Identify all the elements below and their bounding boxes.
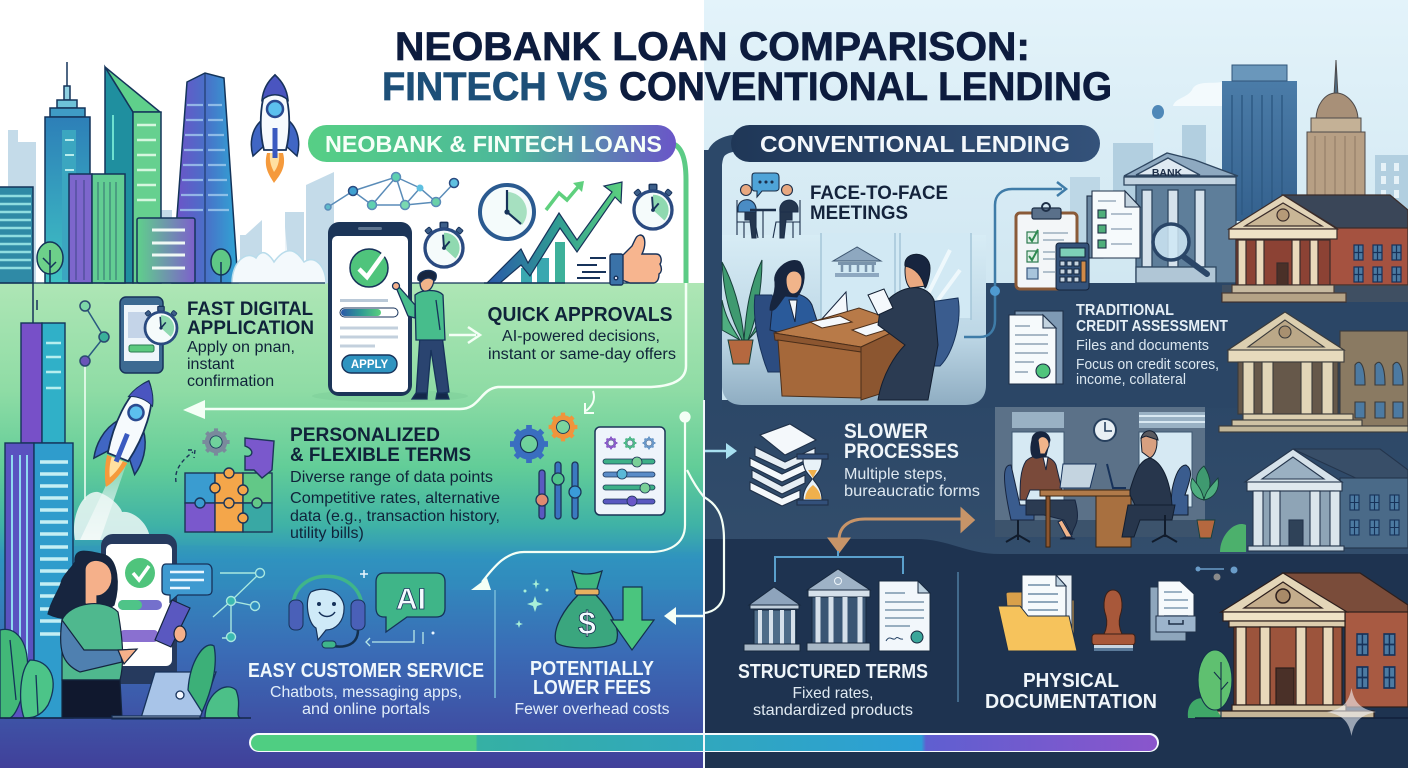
text: personalized and flexible terms: PERSONALIZED bbox=[290, 424, 440, 446]
panel outline: neobank bbox=[660, 143, 686, 283]
text: physical documentation: DOCUMENTATION bbox=[985, 691, 1157, 713]
dark band top bbox=[973, 283, 1408, 408]
icon: clipboard bbox=[1016, 203, 1077, 289]
bank bbox=[1124, 153, 1238, 283]
icon: gears and sliders bbox=[510, 413, 581, 519]
building: purple green bbox=[69, 174, 125, 283]
text: quick approvals bbox=[488, 304, 676, 363]
desk bbox=[774, 308, 908, 400]
person: woman using tablet bbox=[48, 551, 190, 718]
trees bbox=[37, 242, 231, 283]
pill: neobank heading bbox=[308, 125, 676, 162]
text: easy customer service: Chatbots, messaging apps, bbox=[270, 684, 462, 701]
tower: teal bbox=[45, 62, 90, 283]
text: fast digital application: confirmation bbox=[187, 373, 274, 390]
building: brick large bbox=[1214, 573, 1408, 718]
text: personalized and flexible terms: utility bills) bbox=[290, 525, 364, 542]
nodes bbox=[1196, 566, 1238, 580]
title: NEOBANK LOAN COMPARISON: bbox=[395, 25, 1030, 69]
title: FINTECH VS bbox=[382, 65, 608, 109]
icon: stamp bbox=[1092, 590, 1135, 651]
bracket: conventional bbox=[713, 143, 735, 410]
text: quick approvals: AI-powered decisions, bbox=[502, 328, 660, 345]
panel background: conventional side bbox=[704, 0, 1408, 768]
icon: laptop bbox=[112, 672, 216, 719]
text: personalized and flexible terms: data (e.g., transaction history, bbox=[290, 508, 500, 525]
text: structured terms bbox=[738, 661, 928, 719]
plant bbox=[722, 260, 762, 364]
ground line bbox=[0, 282, 640, 284]
building: gradient bbox=[137, 218, 195, 283]
panel background: neobank side bbox=[0, 0, 704, 768]
text: potentially lower fees: POTENTIALLY bbox=[530, 658, 655, 680]
title bbox=[382, 25, 1112, 109]
icon: chat bubble bbox=[162, 564, 212, 602]
text: structured terms: STRUCTURED TERMS bbox=[738, 661, 928, 683]
chairs bbox=[754, 295, 790, 372]
icon: gear and puzzle bbox=[176, 428, 274, 532]
phone: apply: APPLY bbox=[351, 359, 388, 371]
stopwatch bbox=[634, 184, 672, 229]
icon: thumbs up bbox=[577, 235, 661, 285]
text: face to face meetings: MEETINGS bbox=[810, 203, 908, 224]
small curved arrow bbox=[585, 391, 594, 413]
text: potentially lower fees bbox=[514, 658, 670, 718]
text: slower processes: Multiple steps, bbox=[844, 466, 947, 483]
panel line right bbox=[205, 283, 686, 409]
text: fast digital application: APPLICATION bbox=[187, 318, 314, 339]
text: easy customer service: EASY CUSTOMER SERVICE bbox=[248, 660, 484, 682]
building: grey blue bbox=[1220, 449, 1408, 552]
office scene: slower processes bbox=[995, 407, 1218, 547]
left tower network bbox=[33, 283, 109, 500]
card: settings panel bbox=[595, 427, 665, 515]
text: traditional credit assessment: TRADITIONAL bbox=[1076, 302, 1174, 319]
text: traditional credit assessment bbox=[1076, 302, 1228, 388]
tan tower bbox=[1307, 60, 1365, 210]
text: physical documentation bbox=[985, 670, 1157, 713]
text: potentially lower fees: LOWER FEES bbox=[533, 677, 651, 699]
plant bbox=[1191, 466, 1218, 538]
text: personalized and flexible terms: & FLEXIBLE TERMS bbox=[290, 444, 471, 466]
icon: banks and contract bbox=[744, 569, 930, 651]
building: tan bbox=[1219, 312, 1408, 432]
small phone with stopwatch bbox=[120, 297, 177, 373]
text: quick approvals: instant or same-day offers bbox=[488, 346, 676, 363]
text: face to face meetings: FACE-TO-FACE bbox=[810, 183, 948, 204]
person: pointing man bbox=[392, 270, 449, 399]
icon: AI bubble bbox=[366, 573, 445, 646]
icon: face to face meeting bbox=[737, 173, 800, 238]
woman bbox=[770, 261, 848, 340]
bank: BANK bbox=[1152, 167, 1183, 179]
network nodes bbox=[213, 568, 264, 642]
network graph bbox=[325, 172, 458, 210]
icon: file tray bbox=[1150, 581, 1196, 641]
rocket launch bbox=[232, 75, 326, 283]
text: structured terms: Fixed rates, bbox=[792, 685, 874, 702]
text: structured terms: standardized products bbox=[753, 702, 913, 719]
text: slower processes: SLOWER bbox=[844, 420, 928, 443]
divider line bbox=[494, 590, 496, 698]
center divider line bbox=[703, 400, 705, 768]
growth chart with arrows bbox=[484, 181, 622, 283]
clock bbox=[480, 185, 534, 239]
text: traditional credit assessment: Focus on credit scores, bbox=[1076, 357, 1219, 373]
stopwatch bbox=[425, 222, 463, 267]
building: left edge bbox=[0, 187, 33, 283]
text: fast digital application: Apply on pnan, bbox=[187, 339, 295, 356]
icon: paper stack and hourglass bbox=[750, 424, 828, 506]
divider line bbox=[957, 572, 959, 702]
tree and bush bbox=[1188, 650, 1408, 718]
tower: purple blue bbox=[172, 73, 238, 283]
flow arrow to documents bbox=[964, 182, 1066, 337]
man bbox=[1122, 431, 1191, 537]
icon: money bag bbox=[555, 571, 654, 650]
office scene: conventional panel bbox=[722, 233, 986, 405]
pill: conventional heading: CONVENTIONAL LENDING bbox=[760, 131, 1070, 157]
chair legs bbox=[1006, 515, 1177, 542]
text: personalized and flexible terms: Diverse range of data points bbox=[290, 469, 493, 486]
icon: calculator bbox=[1056, 243, 1089, 290]
flow arrow: orange bbox=[830, 510, 973, 551]
text: fast digital application: FAST DIGITAL bbox=[187, 299, 313, 320]
text: traditional credit assessment: CREDIT ASSESSMENT bbox=[1076, 318, 1228, 335]
pill: neobank heading: NEOBANK & FINTECH LOANS bbox=[325, 131, 662, 157]
man bbox=[868, 254, 938, 400]
plants bbox=[0, 629, 240, 718]
phone: woman bbox=[101, 534, 177, 684]
arrow head bbox=[471, 578, 491, 590]
window bbox=[821, 233, 971, 320]
text: slower processes: PROCESSES bbox=[844, 440, 959, 463]
text: face to face meetings bbox=[810, 183, 948, 224]
text: easy customer service: and online portals bbox=[302, 701, 430, 718]
icon: money bag: $ bbox=[578, 605, 596, 641]
rocket: tilted bbox=[74, 372, 171, 540]
progress bar bbox=[249, 733, 1159, 752]
icon: credit document bbox=[1009, 311, 1063, 384]
text: slower processes: bureaucratic forms bbox=[844, 483, 980, 500]
sparkles bbox=[515, 579, 548, 628]
desk bbox=[1040, 490, 1145, 547]
arrow bbox=[449, 327, 480, 343]
tower: green bbox=[105, 67, 161, 283]
text: personalized and flexible terms: Competitive rates, alternative bbox=[290, 490, 500, 507]
title: CONVENTIONAL LENDING bbox=[619, 65, 1112, 109]
icon: magnifier bbox=[1153, 224, 1207, 274]
icon: folder bbox=[998, 575, 1077, 651]
text: quick approvals: QUICK APPROVALS bbox=[488, 304, 672, 326]
icon: checklist document bbox=[1087, 191, 1140, 258]
text: easy customer service bbox=[248, 660, 484, 718]
tower: lower left bbox=[5, 323, 73, 718]
text: traditional credit assessment: Files and documents bbox=[1076, 338, 1209, 354]
right skyline bbox=[1070, 65, 1408, 247]
text: slower processes bbox=[844, 420, 980, 500]
pill: conventional heading bbox=[731, 125, 1100, 162]
arrow bbox=[704, 443, 737, 459]
text: fast digital application: instant bbox=[187, 356, 235, 373]
laptops bbox=[1060, 464, 1096, 488]
text: personalized and flexible terms bbox=[290, 424, 500, 542]
text: fast digital application bbox=[187, 299, 314, 390]
icon: AI bubble: AI bbox=[396, 583, 426, 616]
sparkle mark bbox=[1327, 688, 1376, 736]
text: potentially lower fees: Fewer overhead costs bbox=[514, 701, 670, 718]
icon: headset chat bbox=[289, 570, 368, 648]
ground line bbox=[0, 717, 251, 719]
woman bbox=[1004, 432, 1077, 539]
bracket bbox=[775, 551, 903, 582]
text: physical documentation: PHYSICAL bbox=[1023, 670, 1119, 692]
text: traditional credit assessment: income, collateral bbox=[1076, 372, 1186, 388]
left skyline bbox=[0, 62, 334, 283]
flow arrow: lower right bbox=[482, 412, 724, 613]
arrow to fees bbox=[664, 607, 704, 625]
phone: apply bbox=[312, 222, 468, 402]
arrow head bbox=[183, 400, 205, 419]
building: brick bbox=[1222, 195, 1408, 302]
